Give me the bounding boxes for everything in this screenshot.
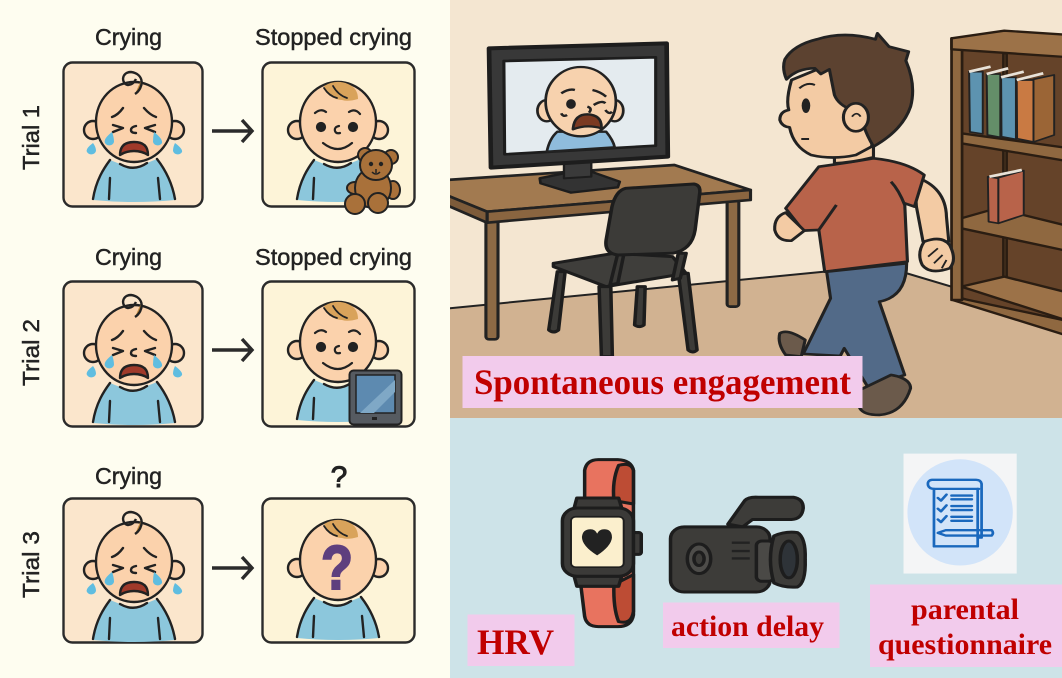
shirt [786,158,924,272]
boy walking [775,33,953,415]
rear shoe [779,332,805,357]
baby on screen [537,67,623,152]
eye and expression [802,98,810,113]
front hand [775,213,804,241]
card: crying baby [64,498,202,642]
label: HRV [468,614,574,666]
panel: trial 3 [18,461,414,642]
label: Spontaneous engagement: Spontaneous engagement [474,362,851,402]
hair [784,33,913,147]
heading: Stopped crying: Stopped crying [255,244,412,270]
label: Trial 3: Trial 3 [18,531,44,598]
panel: trial 2 [18,244,414,426]
ear [843,103,868,131]
desk [446,165,751,339]
label: HRV: HRV [477,622,554,662]
icon: teddy bear [345,148,400,214]
icons: measures [562,454,1017,627]
chair [549,184,700,357]
panel: trial 1 [18,24,414,214]
heading: Crying: Crying [95,24,162,50]
wall [450,0,1062,308]
icon: smartwatch with heart [562,460,641,627]
leaning red book [988,170,1024,223]
rear arm [914,177,949,242]
floor [442,272,1062,427]
books on top shelf [969,67,1054,142]
label: parental questionnaire: questionnaire [878,628,1052,661]
icon: tablet [350,370,402,424]
arrow [212,339,252,361]
heading: question mark: ? [331,461,347,494]
face [778,70,872,159]
card: unknown outcome baby [262,498,414,642]
card: calmed baby with teddy bear [262,62,414,214]
arrow [212,120,252,142]
icon: questionnaire [904,454,1017,574]
heading: Crying: Crying [95,244,162,270]
label: action delay [663,602,840,648]
monitor with crying baby [489,43,668,193]
card: crying baby [64,282,202,426]
trousers [803,263,907,387]
label: Trial 2: Trial 2 [18,319,44,386]
label: parental questionnaire: parental [911,593,1019,626]
label: parental questionnaire [870,584,1062,667]
label: action delay: action delay [671,610,824,643]
panel: room scene [442,0,1062,427]
front shoe [860,375,911,415]
heading: Stopped crying: Stopped crying [255,24,412,50]
card: crying baby [64,62,202,206]
panel: measures background [450,418,1062,678]
label: Trial 1: Trial 1 [18,105,44,170]
card: calmed baby with tablet [262,282,414,426]
icon: purple question mark: ? [321,534,353,603]
icon: video camera [671,497,805,592]
heading: Crying: Crying [95,463,162,489]
neck [834,147,873,163]
arrow [212,557,252,579]
bookshelf [952,31,1062,337]
panel: trials background [0,0,450,678]
